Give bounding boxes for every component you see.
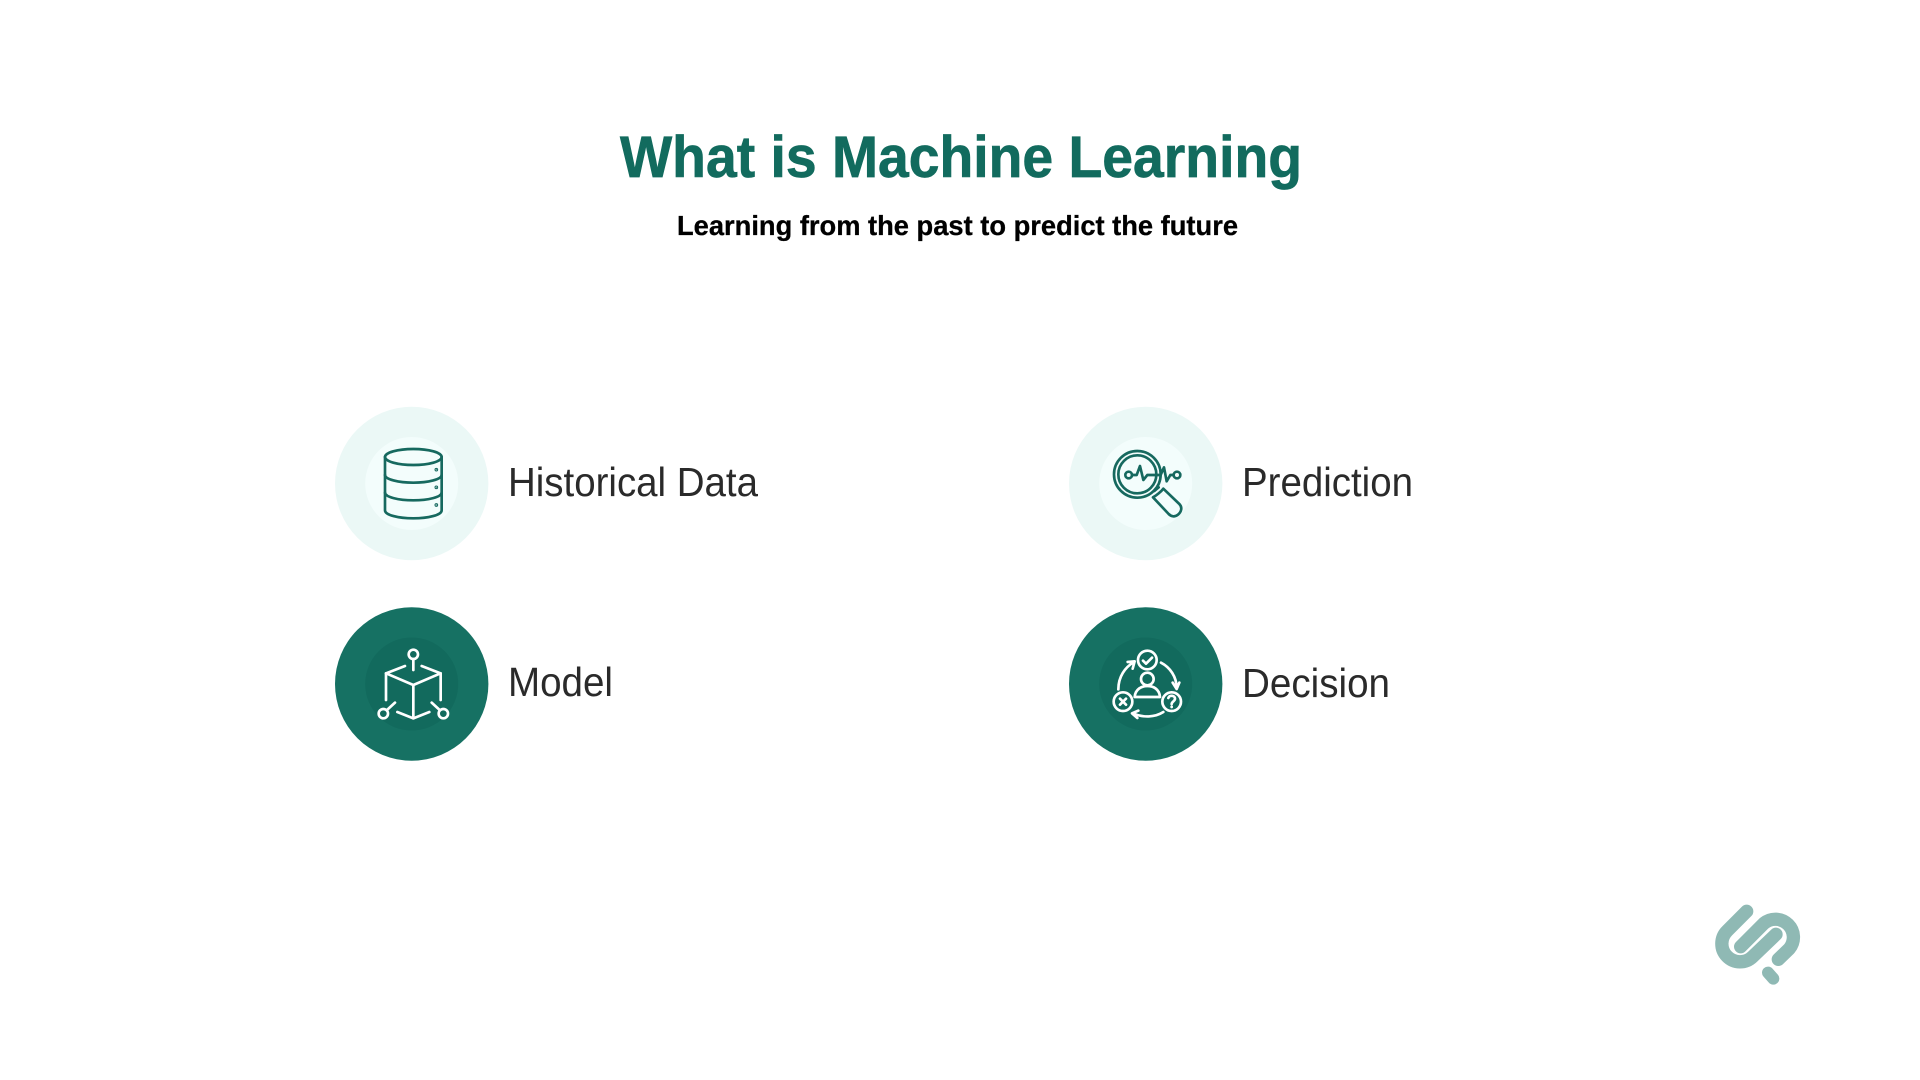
item: Prediction	[1069, 407, 1413, 560]
subtitle: Learning from the past to predict the future	[677, 210, 1238, 241]
item: Historical Data	[335, 407, 758, 560]
icon: decision cycle	[1069, 607, 1222, 761]
icon: magnifier with pulse	[1069, 407, 1222, 560]
icon: 3D cube model	[335, 607, 488, 761]
item: Model	[335, 607, 613, 761]
title: What is Machine Learning	[620, 125, 1302, 190]
label: Historical Data	[508, 459, 758, 505]
label: Decision	[1242, 660, 1390, 706]
label: Model	[508, 659, 613, 705]
label: Prediction	[1242, 459, 1413, 505]
icon: database	[335, 407, 488, 560]
item: Decision	[1069, 607, 1390, 761]
logo	[1722, 911, 1793, 979]
